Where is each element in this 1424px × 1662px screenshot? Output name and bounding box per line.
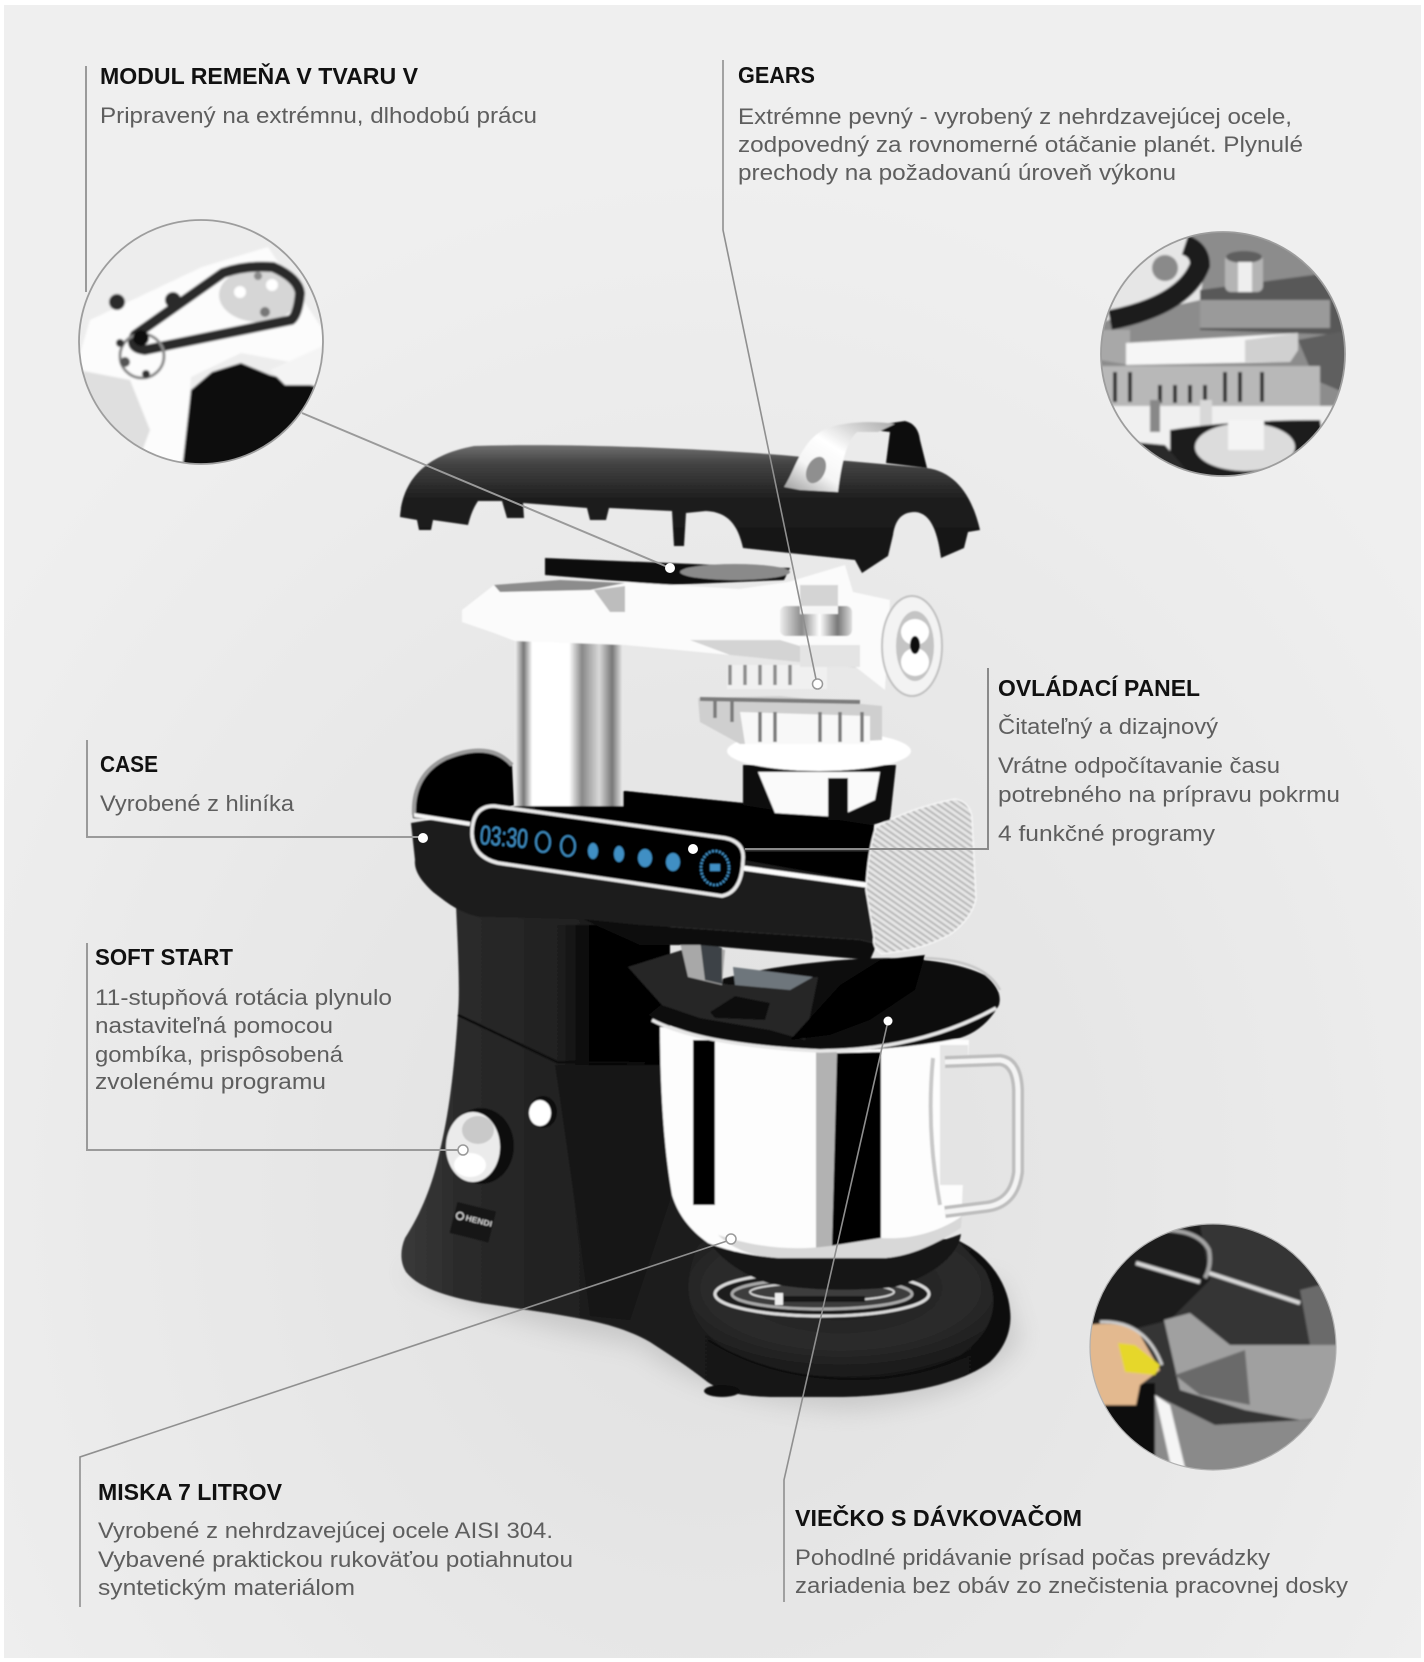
motor frame bbox=[462, 558, 890, 690]
anchor dot bbox=[688, 844, 698, 854]
description: zvolenému programu bbox=[95, 1069, 326, 1094]
control panel bbox=[472, 806, 743, 896]
description: gombíka, prispôsobená bbox=[95, 1042, 344, 1067]
description bbox=[998, 714, 1340, 846]
heading: CASE bbox=[100, 751, 158, 777]
detail circle: gears bbox=[1095, 225, 1350, 481]
callout: soft start bbox=[87, 943, 468, 1155]
description: syntetickým materiálom bbox=[98, 1575, 355, 1600]
anchor dot bbox=[418, 833, 428, 843]
description bbox=[738, 104, 1303, 185]
timer display: 03:30 bbox=[479, 820, 529, 854]
leader line bbox=[80, 1241, 727, 1607]
callout: ovládací panel bbox=[688, 668, 1340, 854]
panel icons bbox=[536, 832, 729, 885]
floor shadow bbox=[400, 1270, 1020, 1410]
description: Vrátne odpočítavanie času bbox=[998, 753, 1280, 778]
anchor dot bbox=[884, 1016, 892, 1026]
leader line bbox=[784, 1021, 888, 1602]
description: zariadenia bez obáv zo znečistenia pracovnej dosky bbox=[795, 1573, 1348, 1598]
stand mixer exploded illustration bbox=[400, 421, 1018, 1397]
mixer base and neck bbox=[401, 905, 1010, 1397]
bowl pedestal ring bbox=[715, 1272, 929, 1316]
description: prechody na požadovanú úroveň výkonu bbox=[738, 160, 1176, 185]
heading: OVLÁDACÍ PANEL bbox=[998, 674, 1200, 701]
top cover with chrome handle bbox=[400, 421, 980, 573]
head cavity bbox=[413, 749, 514, 824]
detail circle: lid with dispenser bbox=[1085, 1220, 1345, 1480]
leader line bbox=[87, 740, 423, 837]
heading: MISKA 7 LITROV bbox=[98, 1479, 283, 1505]
description: Vybavené praktickou rukoväťou potiahnutou bbox=[98, 1547, 573, 1572]
description: Extrémne pevný - vyrobený z nehrdzavejúcej ocele, bbox=[738, 104, 1292, 129]
speed knob bbox=[446, 1096, 557, 1184]
bowl underside bbox=[708, 1234, 961, 1290]
description: 11-stupňová rotácia plynulo bbox=[95, 985, 392, 1010]
leader line bbox=[87, 943, 463, 1150]
description: zodpovedný za rovnomerné otáčanie planét. Plynulé bbox=[738, 132, 1303, 157]
anchor dot bbox=[458, 1145, 468, 1155]
heading: SOFT START bbox=[95, 944, 233, 970]
mixer head bbox=[411, 791, 880, 960]
callout: case bbox=[87, 740, 428, 843]
description: 4 funkčné programy bbox=[998, 821, 1215, 846]
anchor dot bbox=[726, 1234, 736, 1244]
description bbox=[95, 985, 392, 1094]
planetary disc bbox=[882, 596, 942, 696]
leader line bbox=[723, 60, 817, 684]
anchor dot bbox=[812, 679, 822, 689]
description bbox=[795, 1545, 1348, 1598]
callout: viečko s dávkovačom bbox=[784, 1016, 1348, 1602]
heading: VIEČKO S DÁVKOVAČOM bbox=[795, 1504, 1082, 1531]
bowl handle bbox=[931, 1058, 1018, 1212]
callout: gears bbox=[723, 60, 1303, 689]
description: potrebného na prípravu pokrmu bbox=[998, 782, 1340, 807]
lower gear and cup assembly bbox=[698, 696, 911, 825]
mesh side panel bbox=[866, 799, 976, 954]
column bbox=[515, 641, 623, 806]
heading: MODUL REMEŇA V TVARU V bbox=[100, 62, 419, 89]
description: Vyrobené z nehrdzavejúcej ocele AISI 304. bbox=[98, 1518, 553, 1543]
detail circle: V-belt module bbox=[75, 215, 330, 470]
callout: modul remeňa v tvare V bbox=[86, 62, 675, 573]
description bbox=[98, 1518, 573, 1600]
heading: GEARS bbox=[738, 62, 815, 88]
brand logo bbox=[450, 1202, 496, 1243]
leader line bbox=[86, 66, 670, 568]
description: Vyrobené z hliníka bbox=[100, 791, 295, 816]
steel bowl bbox=[660, 1027, 969, 1258]
callout: miska 7 litrov bbox=[80, 1234, 736, 1607]
description: nastaviteľná pomocou bbox=[95, 1013, 333, 1038]
description: Pripravený na extrémnu, dlhodobú prácu bbox=[100, 103, 537, 128]
brand logo: HENDI bbox=[465, 1214, 493, 1229]
description: Pohodlné pridávanie prísad počas prevádzky bbox=[795, 1545, 1270, 1570]
anchor dot bbox=[665, 563, 675, 573]
leader line bbox=[745, 668, 988, 849]
bowl lid with dispenser bbox=[628, 938, 1000, 1051]
description: Čitateľný a dizajnový bbox=[998, 714, 1218, 739]
